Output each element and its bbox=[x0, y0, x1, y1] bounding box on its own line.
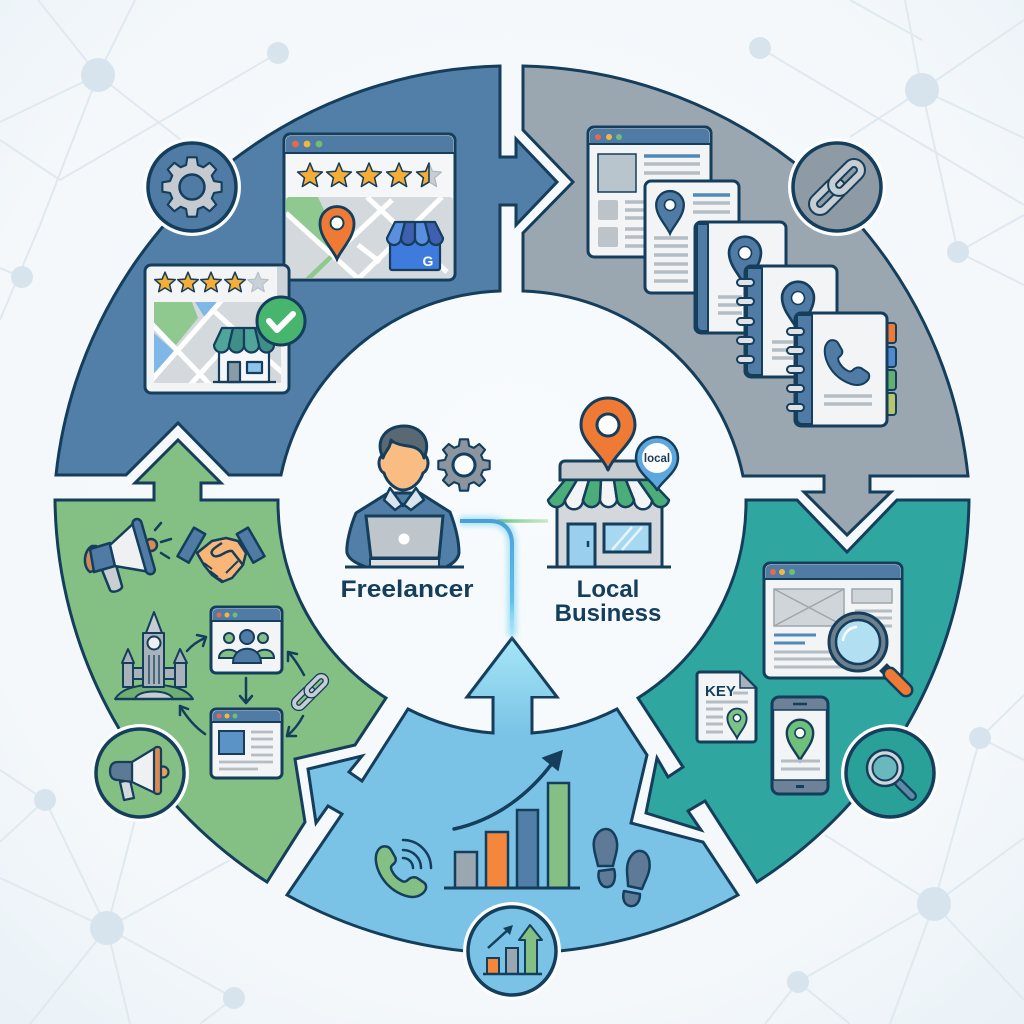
local business storefront bbox=[547, 398, 678, 567]
map pin bbox=[320, 207, 354, 259]
segment shape: grey arc with down arrow bbox=[523, 66, 968, 535]
laptop bbox=[366, 516, 443, 567]
label: Freelancer: Freelancer bbox=[340, 576, 474, 603]
backlink chain icon bbox=[292, 674, 328, 710]
label: Local Business: Local bbox=[577, 576, 639, 603]
website window bbox=[588, 127, 711, 257]
freelancer head bbox=[379, 426, 428, 490]
panel: results and growth (light blue segment) bbox=[287, 638, 738, 1000]
segment shape: light blue arc with up arrow bbox=[287, 638, 738, 953]
panel: local promotion and partnerships (green segment) bbox=[55, 440, 386, 882]
directory notebook one bbox=[695, 222, 786, 333]
icon badge: megaphone bbox=[91, 724, 189, 822]
segment shape: green arc with up arrow bbox=[55, 440, 386, 882]
growth bar chart bbox=[444, 751, 580, 888]
phone book with tabs bbox=[787, 313, 896, 426]
freelancer collar bbox=[384, 488, 424, 510]
segment shape: blue arc with right arrow bbox=[56, 66, 557, 475]
orange location pin bbox=[581, 398, 635, 470]
icon badge: growth chart bbox=[463, 902, 561, 1000]
panel: website and keyword SEO (teal segment) bbox=[638, 500, 969, 882]
store awning bbox=[548, 480, 669, 509]
panel: business profile optimisation (dark blue segment) bbox=[56, 66, 557, 475]
icon badge: gear bbox=[143, 138, 241, 236]
google business store: G bbox=[423, 253, 434, 269]
icon badge: magnifier bbox=[841, 724, 939, 822]
panel: citations and directories (grey segment) bbox=[523, 66, 968, 535]
label: Local Business: Business bbox=[555, 600, 661, 627]
store body bbox=[547, 500, 671, 567]
ground line bbox=[345, 566, 464, 568]
directory notebook two bbox=[737, 266, 837, 377]
store icon bbox=[213, 328, 276, 382]
review and map window bbox=[284, 134, 455, 282]
google business store bbox=[387, 222, 443, 270]
icon badge: chain link bbox=[788, 138, 886, 236]
phone call icon bbox=[376, 840, 431, 897]
megaphone bbox=[85, 518, 171, 592]
local tag pin: local bbox=[644, 453, 670, 465]
freelancer figure bbox=[345, 426, 464, 567]
listing card with verified store bbox=[145, 265, 305, 393]
listing page with pin bbox=[645, 181, 739, 293]
city hall building bbox=[115, 612, 193, 699]
store sign bbox=[560, 461, 648, 480]
keyword document: KEY bbox=[705, 683, 736, 700]
SEO website window with magnifier bbox=[764, 563, 906, 690]
handshake bbox=[177, 528, 265, 582]
article window bbox=[211, 709, 282, 778]
freelancer body bbox=[347, 493, 459, 567]
magnifying glass bbox=[829, 613, 906, 690]
community window bbox=[211, 607, 282, 673]
footprints icon bbox=[594, 829, 650, 906]
gear icon by freelancer bbox=[438, 439, 490, 491]
center connector line bbox=[460, 521, 548, 636]
keyword document bbox=[697, 672, 756, 742]
flow arrows between nodes bbox=[180, 635, 304, 736]
segment shape: teal arc with lower left arrow bbox=[638, 500, 969, 882]
smartphone with pin bbox=[772, 697, 828, 794]
check badge bbox=[257, 297, 305, 345]
local tag pin bbox=[636, 437, 678, 490]
